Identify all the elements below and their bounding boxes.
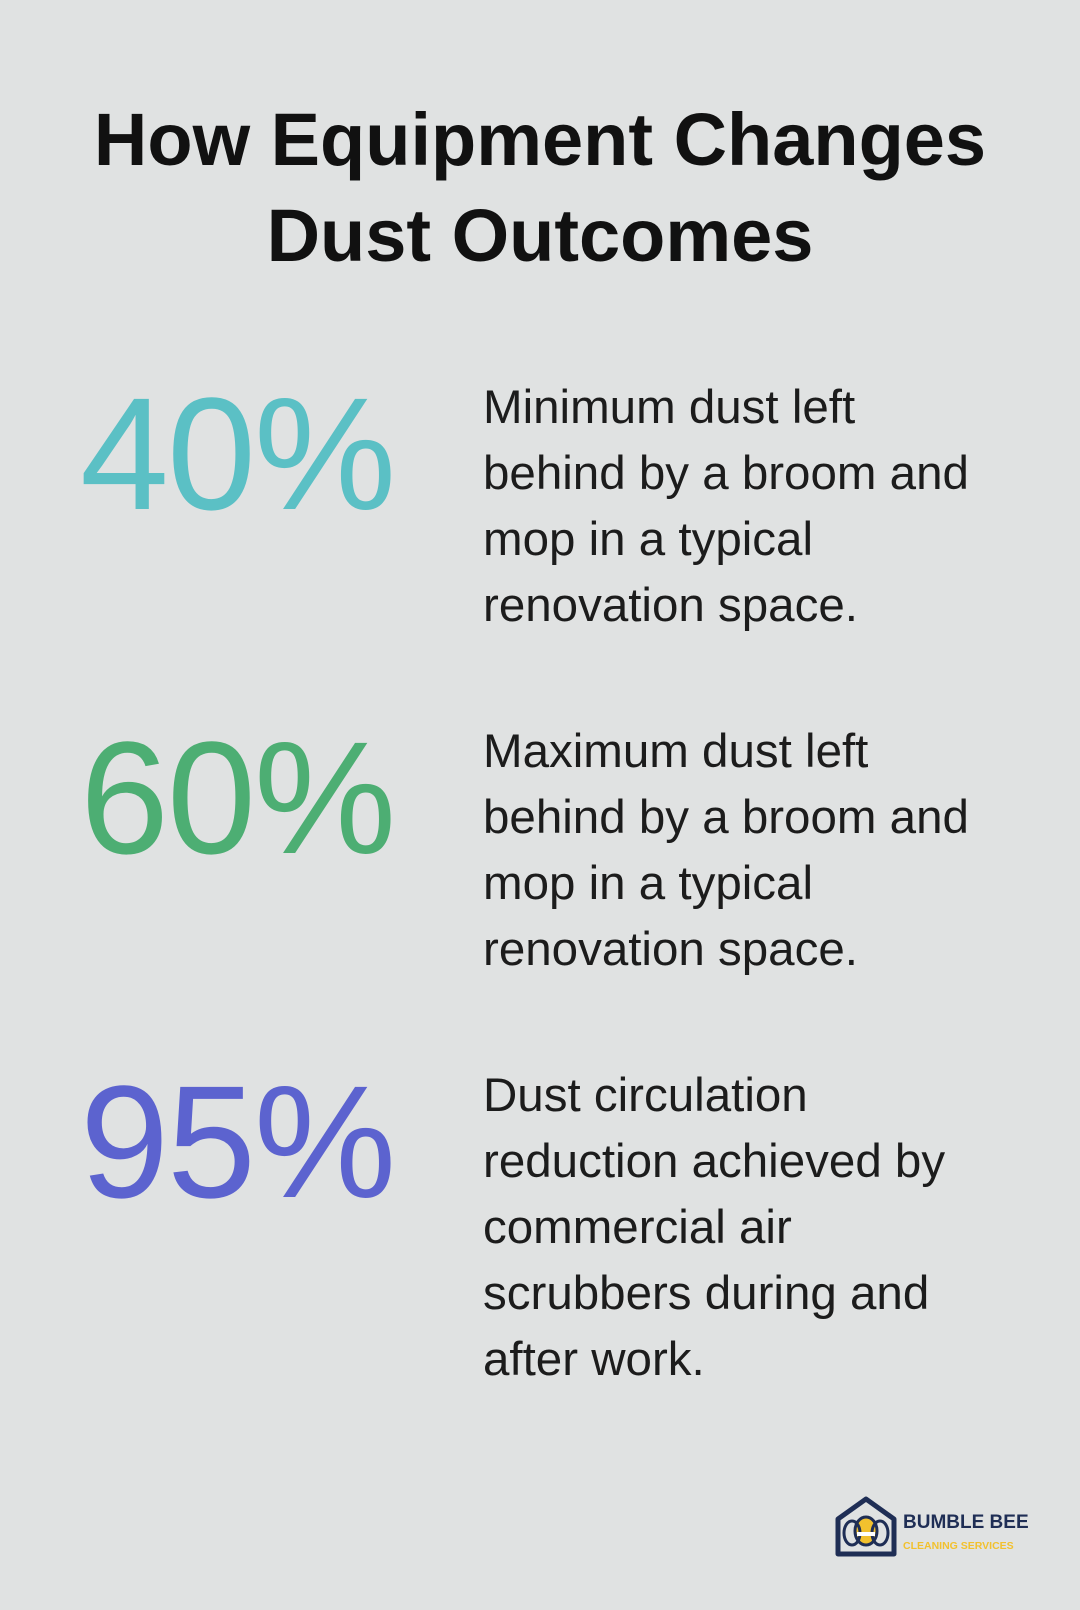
text: 60% description: Maximum dust left (483, 725, 868, 778)
title: How Equipment Changes (94, 98, 986, 181)
stat 95%: 95% (80, 1052, 394, 1231)
logo (836, 1496, 1029, 1556)
text: 95% description: commercial air (483, 1201, 792, 1254)
text: 95% description: after work. (483, 1333, 705, 1386)
text: 40% description: mop in a typical (483, 513, 813, 566)
icon: bee house (836, 1496, 896, 1556)
text: 60% description: renovation space. (483, 923, 858, 976)
text: 60% description: mop in a typical (483, 857, 813, 910)
logo text (903, 1512, 1029, 1552)
text: 60% description: behind by a broom and (483, 791, 969, 844)
text: 40% description: renovation space. (483, 579, 858, 632)
title: Dust Outcomes (267, 194, 813, 277)
text: 40% description: behind by a broom and (483, 447, 969, 500)
text: 60% description (483, 725, 969, 976)
text: 95% description: scrubbers during and (483, 1267, 929, 1320)
text: 95% description: Dust circulation (483, 1069, 808, 1122)
logo text: BUMBLE BEE (903, 1512, 1029, 1533)
text: 95% description (483, 1069, 945, 1386)
text: 95% description: reduction achieved by (483, 1135, 945, 1188)
text: 40% description: Minimum dust left (483, 381, 855, 434)
title (94, 98, 986, 277)
text: 40% description (483, 381, 969, 632)
logo text: CLEANING SERVICES (903, 1540, 1014, 1552)
stat 40%: 40% (80, 364, 394, 543)
stat 60%: 60% (80, 708, 394, 887)
